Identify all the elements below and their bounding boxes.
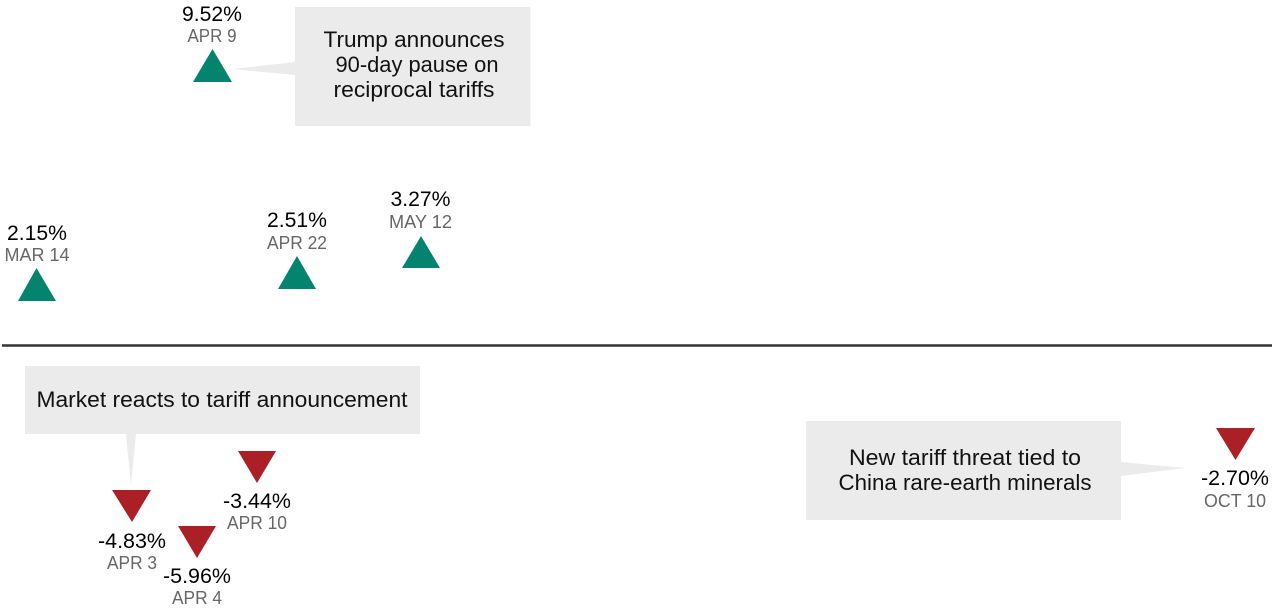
marker: APR 9 up 9.52% bbox=[182, 3, 242, 82]
marker: APR 22 up 2.51%: 2.51% bbox=[267, 209, 327, 232]
marker: MAR 14 up 2.15%: 2.15% bbox=[7, 222, 67, 245]
callout: new tariff threat: China rare-earth minerals bbox=[838, 470, 1092, 495]
callout: 90-day pause: Trump announces bbox=[324, 27, 504, 52]
marker: MAY 12 up 3.27%: 3.27% bbox=[390, 188, 450, 211]
marker: OCT 10 down -2.70% bbox=[1201, 428, 1269, 511]
marker: MAY 12 up 3.27%: MAY 12 bbox=[389, 211, 452, 232]
marker: APR 22 up 2.51% bbox=[267, 209, 327, 289]
callout: market reacts bbox=[25, 366, 420, 485]
callout: 90-day pause: reciprocal tariffs bbox=[334, 77, 494, 102]
marker: APR 3 down -4.83%: APR 3 bbox=[107, 552, 157, 573]
callout: new tariff threat bbox=[806, 421, 1185, 520]
marker: APR 3 down -4.83% bbox=[98, 490, 166, 573]
marker: MAR 14 up 2.15%: MAR 14 bbox=[4, 244, 70, 265]
callout: market reacts: Market reacts to tariff announcement bbox=[36, 387, 408, 412]
marker: OCT 10 down -2.70%: OCT 10 bbox=[1204, 490, 1266, 511]
marker: APR 10 down -3.44% bbox=[223, 451, 291, 533]
marker: MAR 14 up 2.15% bbox=[4, 222, 70, 301]
marker: APR 10 down -3.44%: -3.44% bbox=[223, 490, 291, 513]
marker: APR 3 down -4.83%: -4.83% bbox=[98, 530, 166, 553]
callout: new tariff threat: New tariff threat tied to bbox=[849, 445, 1081, 470]
callout: 90-day pause bbox=[232, 7, 530, 126]
marker: APR 10 down -3.44%: APR 10 bbox=[227, 512, 287, 533]
marker: OCT 10 down -2.70%: -2.70% bbox=[1201, 467, 1269, 490]
marker: APR 9 up 9.52%: APR 9 bbox=[188, 25, 236, 46]
callout: 90-day pause: 90-day pause on bbox=[336, 52, 498, 77]
marker: APR 4 down -5.96%: APR 4 bbox=[172, 587, 222, 608]
marker: APR 9 up 9.52%: 9.52% bbox=[182, 3, 242, 26]
marker: APR 4 down -5.96% bbox=[163, 526, 231, 608]
marker: APR 22 up 2.51%: APR 22 bbox=[267, 232, 327, 253]
marker: MAY 12 up 3.27% bbox=[389, 188, 452, 268]
marker: APR 4 down -5.96%: -5.96% bbox=[163, 565, 231, 588]
